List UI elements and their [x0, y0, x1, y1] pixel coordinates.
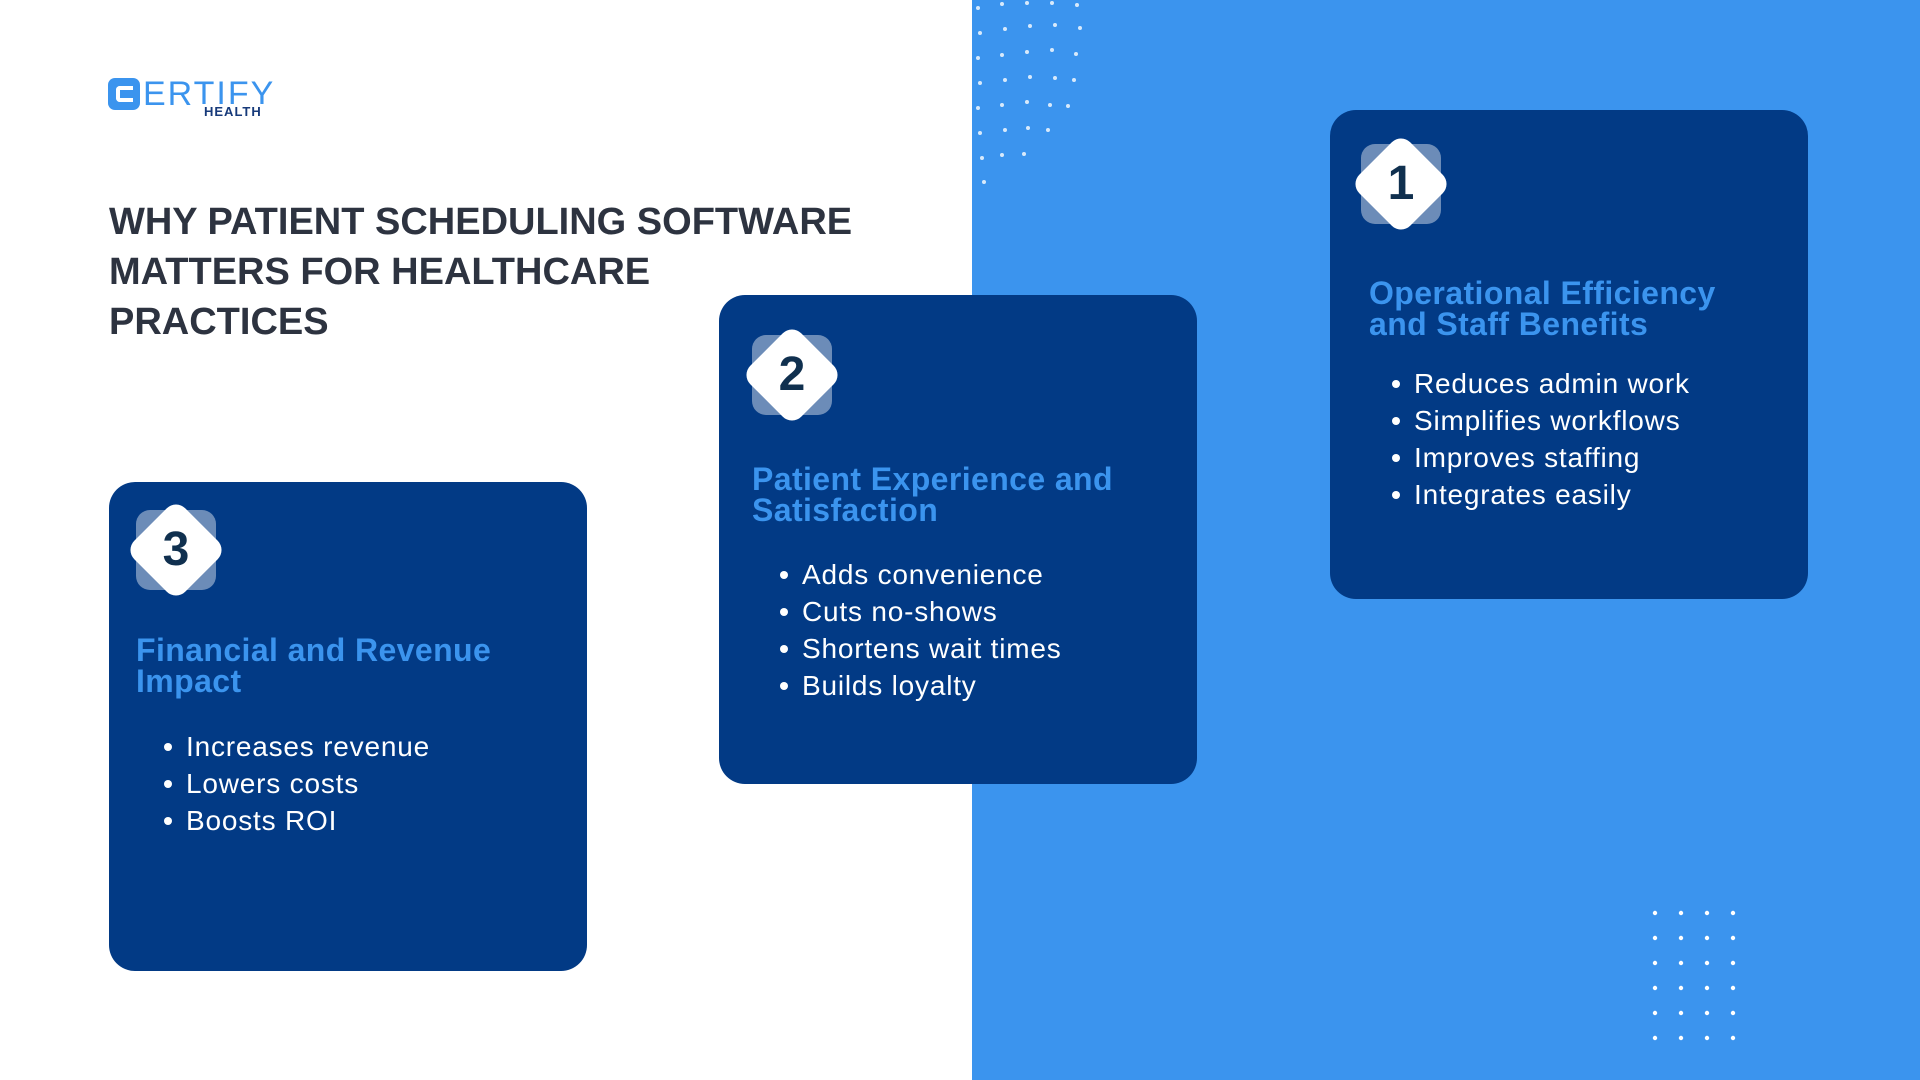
title: WHY PATIENT SCHEDULING SOFTWARE: [109, 201, 852, 243]
decorative dots top: [976, 1, 1082, 184]
bullets 3: Lowers costs: [186, 768, 359, 799]
icon: badge 1: [1356, 138, 1446, 230]
panel: card 1: [1330, 110, 1808, 599]
heading 2: Satisfaction: [752, 492, 938, 528]
bullets 2: [780, 559, 1062, 701]
bullets 2: Builds loyalty: [802, 670, 977, 701]
title: MATTERS FOR HEALTHCARE: [109, 251, 650, 293]
bullets 2: Cuts no-shows: [802, 596, 998, 627]
logo: [108, 75, 275, 119]
heading 1: [1369, 275, 1716, 342]
bullets 3: [164, 731, 430, 836]
heading 1: Operational Efficiency: [1369, 275, 1716, 311]
icon: badge 1: 1: [1388, 157, 1414, 210]
bullets 2: Shortens wait times: [802, 633, 1062, 664]
bullets 1: [1392, 368, 1690, 510]
heading 1: and Staff Benefits: [1369, 306, 1648, 342]
logo: ERTIFY: [143, 75, 275, 113]
heading 3: [136, 632, 491, 699]
bullets 1: Simplifies workflows: [1414, 405, 1680, 436]
logo: HEALTH: [204, 104, 262, 119]
decorative dots bottom: [1652, 910, 1736, 1040]
icon: badge 2: 2: [779, 348, 805, 401]
title: PRACTICES: [109, 301, 329, 343]
icon: badge 3: 3: [163, 523, 189, 576]
bullets 1: Integrates easily: [1414, 479, 1632, 510]
title: [109, 201, 852, 343]
bullets 3: Increases revenue: [186, 731, 430, 762]
icon: badge 2: [746, 330, 838, 420]
icon: badge 3: [130, 504, 222, 596]
heading 2: [752, 461, 1113, 528]
panel: card 2: [719, 295, 1197, 784]
panel: card 3: [109, 482, 587, 971]
heading 3: Financial and Revenue: [136, 632, 491, 668]
bullets 2: Adds convenience: [802, 559, 1044, 590]
heading 2: Patient Experience and: [752, 461, 1113, 497]
bullets 1: Reduces admin work: [1414, 368, 1690, 399]
bullets 1: Improves staffing: [1414, 442, 1640, 473]
heading 3: Impact: [136, 663, 242, 699]
bullets 3: Boosts ROI: [186, 805, 337, 836]
